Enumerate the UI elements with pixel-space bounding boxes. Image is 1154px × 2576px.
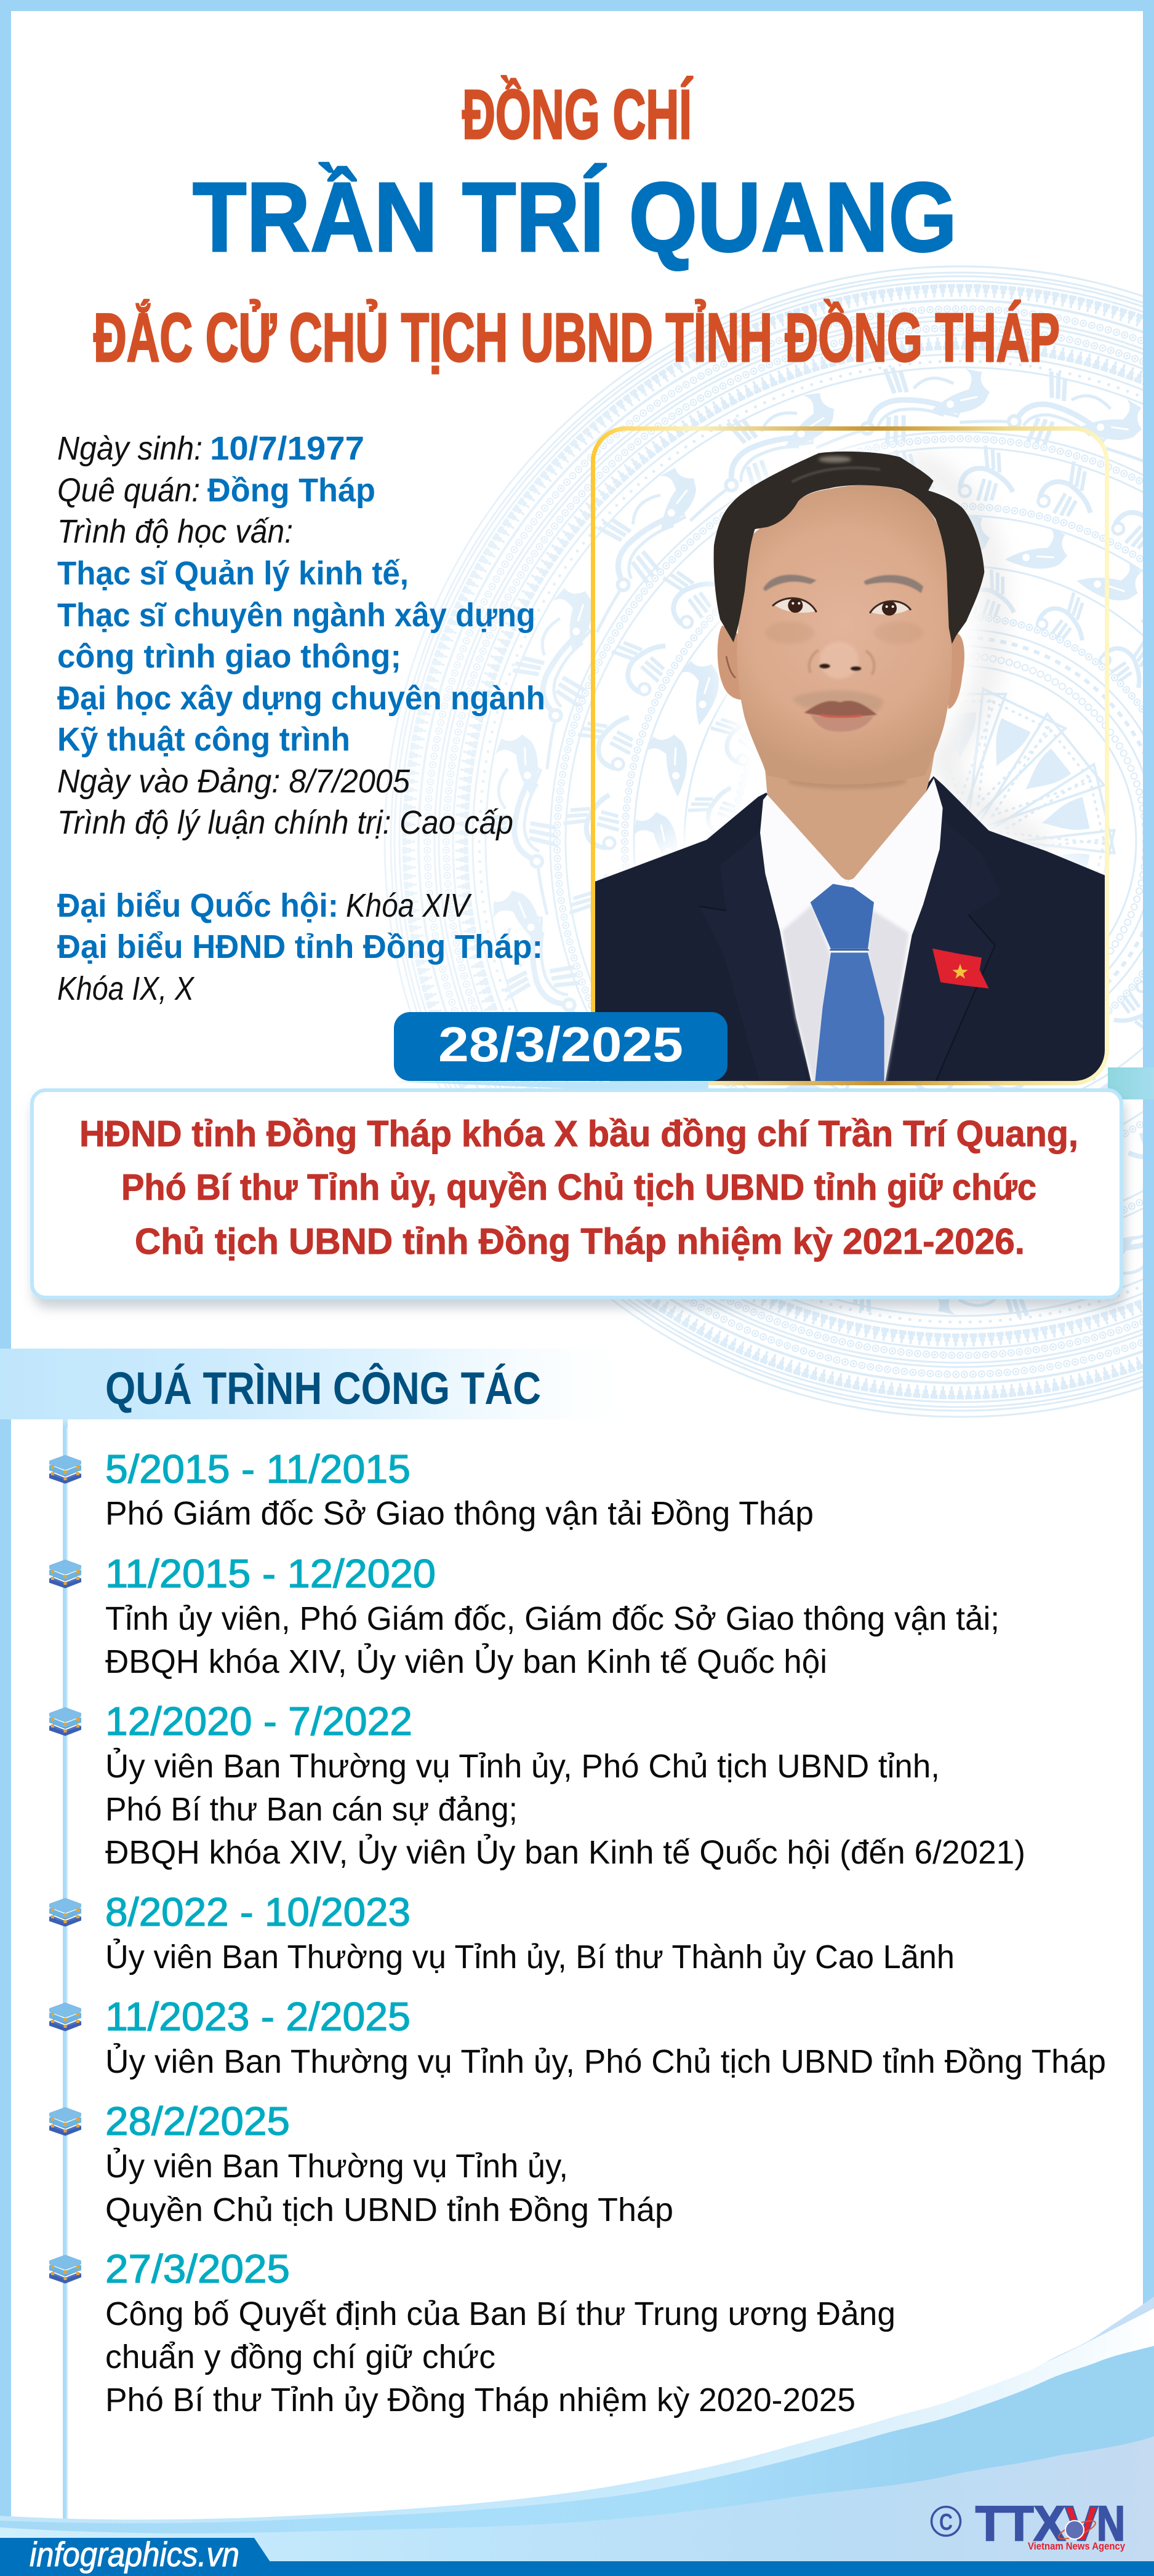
biography text block: 10/7/1977 bbox=[210, 430, 364, 467]
callout: election announcement: Phó Bí thư Tỉnh ủy, quyền Chủ tịch UBND tỉnh giữ chức bbox=[121, 1167, 1036, 1208]
logo: TTXVN Vietnam News Agency: N bbox=[1097, 2496, 1125, 2551]
copyright mark bbox=[932, 2506, 960, 2536]
biography text block: Trình độ lý luận chính trị: Cao cấp bbox=[57, 804, 513, 841]
timeline item 1 bbox=[49, 1446, 814, 1532]
timeline item 3: Ủy viên Ban Thường vụ Tỉnh ủy, Phó Chủ tịch UBND tỉnh, bbox=[105, 1748, 940, 1785]
suit, shirt, neck, tie and pin bbox=[589, 746, 1106, 1087]
timeline item 4: Ủy viên Ban Thường vụ Tỉnh ủy, Bí thư Thành ủy Cao Lãnh bbox=[105, 1939, 955, 1976]
timeline item 3: Phó Bí thư Ban cán sự đảng; bbox=[105, 1791, 518, 1828]
timeline item 6 bbox=[49, 2099, 673, 2228]
biography text block: Đại học xây dựng chuyên ngành bbox=[57, 680, 545, 717]
timeline item 2: ĐBQH khóa XIV, Ủy viên Ủy ban Kinh tế Quốc hội bbox=[105, 1643, 827, 1680]
timeline item 1: 5/2015 - 11/2015 bbox=[105, 1446, 411, 1491]
date badge: 28/3/2025 bbox=[438, 1017, 683, 1072]
biography text block: Quê quán: bbox=[57, 472, 200, 509]
timeline item 3: ĐBQH khóa XIV, Ủy viên Ủy ban Kinh tế Quốc hội (đến 6/2021) bbox=[105, 1834, 1025, 1871]
callout: election announcement bbox=[32, 1090, 1121, 1298]
gold photo frame bbox=[593, 428, 1107, 1083]
title: Đồng chí: ĐỒNG CHÍ bbox=[462, 76, 693, 153]
callout: election announcement: HĐND tỉnh Đồng Tháp khóa X bầu đồng chí Trần Trí Quang, bbox=[79, 1114, 1078, 1154]
logo: TTXVN Vietnam News Agency: Vietnam News Agency bbox=[1028, 2540, 1125, 2552]
biography text block: Kỹ thuật công trình bbox=[57, 721, 350, 758]
date ribbon fold bbox=[394, 1082, 708, 1094]
biography text block: công trình giao thông; bbox=[57, 638, 401, 675]
timeline item 3 bbox=[49, 1699, 1025, 1871]
portrait photo bbox=[589, 449, 1126, 1087]
infographics.vn tab: infographics.vn bbox=[30, 2535, 239, 2574]
biography text block: Thạc sĩ chuyên ngành xây dựng bbox=[57, 597, 535, 634]
title: Trần Trí Quang: TRẦN TRÍ QUANG bbox=[193, 162, 957, 272]
timeline item 2: Tỉnh ủy viên, Phó Giám đốc, Giám đốc Sở Giao thông vận tải; bbox=[105, 1600, 1000, 1637]
biography text block: Thạc sĩ Quản lý kinh tế, bbox=[57, 555, 409, 592]
timeline item 7: chuẩn y đồng chí giữ chức bbox=[105, 2339, 495, 2375]
head: hair, face and features bbox=[714, 452, 984, 784]
timeline item 7: Phó Bí thư Tỉnh ủy Đồng Tháp nhiệm kỳ 2020-2025 bbox=[105, 2382, 855, 2418]
copyright mark: C bbox=[939, 2510, 953, 2535]
section heading band: QUÁ TRÌNH CÔNG TÁC bbox=[105, 1363, 541, 1414]
timeline item 7 bbox=[49, 2246, 896, 2418]
timeline item 2 bbox=[49, 1551, 1000, 1680]
biography text block: Ngày vào Đảng: 8/7/2005 bbox=[57, 763, 411, 800]
timeline item 5: 11/2023 - 2/2025 bbox=[105, 1994, 411, 2039]
timeline item 7: Công bố Quyết định của Ban Bí thư Trung ương Đảng bbox=[105, 2295, 896, 2332]
bottom waves bbox=[0, 2297, 1154, 2576]
biography text block: Khóa IX, X bbox=[57, 970, 195, 1007]
national assembly flag pin bbox=[932, 949, 989, 989]
biography text block: Đồng Tháp bbox=[207, 472, 375, 509]
bronze drum background pattern bbox=[385, 266, 1154, 1417]
biography text block: Đại biểu Quốc hội: bbox=[57, 887, 339, 924]
timeline item 7: 27/3/2025 bbox=[105, 2246, 290, 2291]
section heading band bbox=[0, 1349, 622, 1419]
teal corner strip bbox=[1108, 1067, 1154, 1099]
date badge bbox=[394, 1012, 727, 1081]
timeline item 1: Phó Giám đốc Sở Giao thông vận tải Đồng Tháp bbox=[105, 1495, 814, 1532]
biography text block bbox=[57, 430, 545, 1007]
timeline item 6: Quyền Chủ tịch UBND tỉnh Đồng Tháp bbox=[105, 2191, 673, 2228]
soft halo behind the portrait bbox=[591, 449, 1126, 1083]
logo: TTXVN Vietnam News Agency bbox=[932, 2496, 1125, 2552]
timeline item 4: 8/2022 - 10/2023 bbox=[105, 1889, 411, 1934]
timeline item 4 bbox=[49, 1889, 955, 1976]
timeline item 3: 12/2020 - 7/2022 bbox=[105, 1699, 412, 1744]
logo: TTXVN Vietnam News Agency: V bbox=[1065, 2496, 1098, 2551]
biography text block: Khóa XIV bbox=[346, 887, 472, 924]
biography text block: Trình độ học vấn: bbox=[57, 513, 293, 550]
timeline item 6: 28/2/2025 bbox=[105, 2099, 290, 2143]
timeline item 5 bbox=[49, 1994, 1106, 2080]
footer bar bbox=[0, 2561, 1154, 2576]
timeline item 6: Ủy viên Ban Thường vụ Tỉnh ủy, bbox=[105, 2148, 568, 2185]
callout: election announcement: Chủ tịch UBND tỉnh Đồng Tháp nhiệm kỳ 2021-2026. bbox=[135, 1221, 1025, 1262]
timeline vertical line bbox=[63, 1400, 68, 2522]
timeline item 5: Ủy viên Ban Thường vụ Tỉnh ủy, Phó Chủ tịch UBND tỉnh Đồng Tháp bbox=[105, 2043, 1106, 2080]
logo: TTXVN Vietnam News Agency: TTX bbox=[976, 2496, 1065, 2551]
biography text block: Ngày sinh: bbox=[57, 430, 202, 467]
timeline item 2: 11/2015 - 12/2020 bbox=[105, 1551, 436, 1596]
biography text block: Đại biểu HĐND tỉnh Đồng Tháp: bbox=[57, 928, 543, 965]
